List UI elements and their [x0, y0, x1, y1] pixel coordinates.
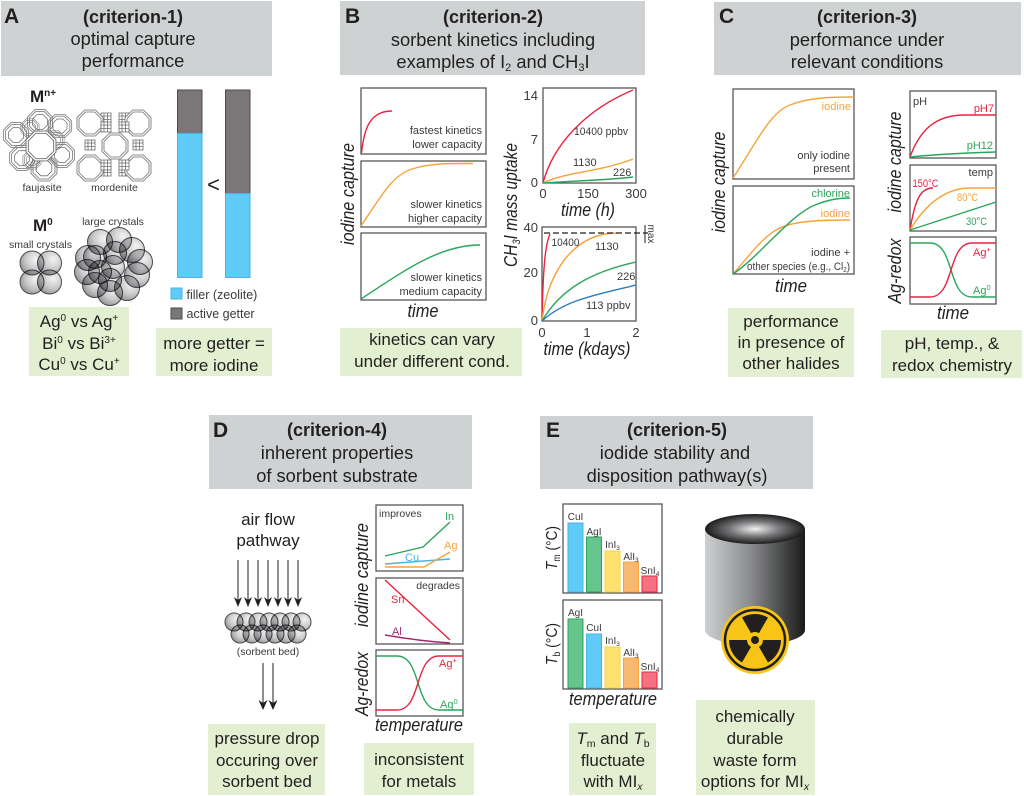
- callout: pH temp redox: redox chemistry: [892, 356, 1012, 375]
- chart: degrades: degrades: [416, 580, 460, 592]
- header B: (criterion-2): [443, 7, 543, 27]
- chart: uptake in kdays: 0: [538, 325, 546, 340]
- chart: slower kinetics higher capacity: [361, 161, 486, 227]
- chart: uptake in kdays: [524, 220, 648, 340]
- chart: temperature: 30°C: [966, 216, 987, 228]
- callout: oxidation states: vs Cu: [66, 355, 114, 374]
- axis: time: time: [937, 303, 969, 323]
- chart: temperature: temp: [969, 167, 993, 179]
- bar chart: boiling points: AgI: [568, 608, 583, 619]
- chart: uptake in kdays: 1130: [595, 241, 619, 253]
- legend: filler (zeolite): [186, 288, 257, 302]
- header E: [540, 416, 813, 489]
- bar chart: melting points: 3: [635, 557, 639, 564]
- chart: uptake in hours: 0: [531, 175, 538, 190]
- callout: pressure drop: pressure drop: [215, 729, 319, 748]
- header B: B: [345, 5, 360, 28]
- chart: temperature: [910, 165, 996, 231]
- icon: faujasite framework: [4, 110, 74, 181]
- axis: boiling temperature: (°C): [544, 623, 561, 652]
- axis: melting temperature: (°C): [544, 526, 561, 554]
- chart: uptake in hours: 300: [625, 186, 647, 201]
- header A: A: [4, 5, 19, 28]
- bar chart: boiling points: SnI: [641, 662, 656, 673]
- chart: Ag redox vs temperature: +: [452, 656, 457, 665]
- icon: small crystals: [20, 251, 62, 294]
- header B: sorbent kinetics including: [391, 29, 595, 50]
- axis: iodine capture: iodine capture: [885, 112, 905, 212]
- bar chart: boiling points: 3: [616, 641, 620, 648]
- header D: (criterion-4): [287, 420, 387, 440]
- label: M 0: M: [33, 216, 47, 235]
- chart: uptake in hours: 1130: [573, 157, 597, 169]
- icon: radiation symbol: [721, 606, 789, 674]
- chart: temperature: 150°C: [912, 178, 939, 190]
- axis: iodine capture: iodine capture: [338, 143, 358, 245]
- bar chart: boiling points: [563, 600, 662, 689]
- chart: uptake in hours: 0: [539, 186, 547, 201]
- callout: pH temp redox: pH, temp., &: [905, 334, 1000, 353]
- callout: pH temp redox: [881, 330, 1022, 378]
- axis: Ag-redox: Ag-redox: [352, 651, 372, 717]
- chart: Ag redox vs temperature: 0: [453, 697, 458, 706]
- header B: 3: [578, 62, 584, 74]
- axis: boiling temperature: T: [544, 655, 561, 665]
- chart: iodine plus other species: iodine +: [811, 247, 850, 259]
- header B: [340, 1, 645, 75]
- callout: durable waste forms: chemically: [715, 707, 795, 726]
- chart: only iodine: iodine: [822, 101, 851, 113]
- callout: other halides: [728, 308, 854, 377]
- label: large crystals: large crystals: [82, 216, 144, 228]
- callout: pressure drop: [208, 724, 325, 795]
- chart: pH: pH: [913, 96, 927, 108]
- label: faujasite: faujasite: [22, 182, 62, 194]
- header E: E: [546, 419, 560, 442]
- callout: oxidation states: vs Bi: [63, 334, 104, 353]
- callout: oxidation states: 3+: [104, 335, 116, 346]
- text: air flow pathway: [236, 510, 300, 550]
- axis: iodine capture: iodine capture: [352, 523, 372, 627]
- label: M 0: 0: [47, 217, 53, 228]
- callout: oxidation states: Ag: [40, 312, 61, 331]
- bar chart: melting points: CuI: [568, 512, 583, 523]
- callout: other halides: in presence of: [738, 333, 845, 352]
- header D: inherent properties: [261, 442, 413, 463]
- header D: [209, 415, 472, 489]
- callout: Tm and Tb: x: [636, 781, 643, 793]
- callout: Tm and Tb: with MI: [583, 772, 637, 791]
- callout: pressure drop: occuring over: [216, 751, 318, 770]
- header C: performance under: [790, 29, 944, 50]
- header A: [1, 1, 272, 76]
- chart: iodine plus other species: 2: [843, 267, 847, 274]
- panel E: criterion 5: [540, 416, 815, 795]
- callout: durable waste forms: durable: [727, 729, 783, 748]
- header E: disposition pathway(s): [587, 465, 767, 486]
- header E: (criterion-5): [627, 420, 727, 440]
- chart: Ag redox vs temperature: Ag: [439, 658, 452, 670]
- chart: uptake in kdays: 226: [617, 271, 635, 283]
- chart: improves: In: [445, 511, 454, 523]
- legend: active getter: [186, 307, 255, 321]
- icon: mordenite framework: [77, 110, 151, 181]
- callout: other halides: performance: [743, 312, 839, 331]
- bar chart: melting points: [563, 504, 662, 593]
- callout: durable waste forms: options for MI: [701, 772, 804, 791]
- less-than sign: <: [207, 172, 220, 197]
- label: small crystals: small crystals: [9, 239, 72, 251]
- label: sorbent bed: (sorbent bed): [237, 646, 299, 658]
- callout: Tm and Tb: T: [576, 729, 588, 748]
- callout: inconsistent for metals: inconsistent: [374, 750, 464, 769]
- callout: kinetics: [340, 328, 522, 376]
- callout: other halides: other halides: [742, 354, 840, 373]
- bar chart: boiling points: CuI: [586, 623, 602, 634]
- callout: Tm and Tb: m: [587, 738, 596, 750]
- axis: melting temperature: T: [544, 561, 561, 570]
- callout: oxidation states: Cu: [38, 355, 60, 374]
- chart: only iodine: present: [813, 163, 850, 175]
- callout: durable waste forms: x: [803, 781, 810, 793]
- bar: low getter: [178, 90, 202, 278]
- chart: Ag redox vs temperature: Ag: [440, 699, 453, 711]
- callout: Tm and Tb: b: [644, 738, 650, 750]
- callout: inconsistent for metals: [364, 743, 474, 795]
- chart: uptake in kdays: 0: [531, 313, 538, 328]
- callout: oxidation states: [29, 307, 129, 376]
- callout: more getter: [156, 328, 272, 376]
- chart: uptake in kdays: 1: [583, 325, 591, 340]
- axis: CH3I mass uptake: 3: [511, 239, 523, 245]
- chart: degrades: [376, 578, 463, 644]
- chart: uptake in kdays: 113 ppbv: [586, 300, 631, 312]
- chart: slower kinetics medium capacity: slower kinetics: [410, 272, 482, 284]
- callout: Tm and Tb: and: [596, 729, 633, 748]
- text: air flow pathway: pathway: [236, 531, 300, 550]
- header D: of sorbent substrate: [256, 465, 418, 486]
- callout: Tm and Tb: fluctuate: [581, 751, 645, 770]
- label: M n+: n+: [44, 88, 56, 99]
- callout: more getter: more iodine: [170, 356, 258, 375]
- axis: Ag-redox: Ag-redox: [885, 238, 905, 304]
- chart: Ag redox vs time: Ag: [973, 285, 986, 297]
- chart: only iodine: only iodine: [797, 150, 850, 162]
- label: max: max: [645, 225, 656, 243]
- chart: uptake in hours: 150: [577, 186, 599, 201]
- bar chart: melting points: 3: [616, 545, 620, 552]
- callout: inconsistent for metals: for metals: [382, 772, 456, 791]
- bar chart: melting points: SnI: [641, 566, 656, 577]
- chart: uptake in hours: 14: [524, 88, 538, 103]
- header C: [714, 2, 1021, 75]
- chart: uptake in hours: 7: [531, 132, 538, 147]
- callout: durable waste forms: waste form: [712, 751, 797, 770]
- axis: melting temperature: m: [552, 554, 563, 562]
- header C: C: [719, 5, 734, 28]
- chart: Ag redox vs time: +: [986, 245, 991, 254]
- callout: oxidation states: vs Ag: [66, 312, 112, 331]
- chart: pH: [910, 91, 996, 158]
- panel B: criterion 2: [338, 1, 656, 376]
- chart: uptake in hours: 10400 ppbv: [574, 126, 628, 138]
- header A: optimal capture: [70, 28, 196, 49]
- chart: uptake in hours: [524, 88, 647, 201]
- callout: kinetics: kinetics can vary: [369, 330, 495, 349]
- header B: I: [584, 51, 590, 72]
- callout: oxidation states: 0: [60, 356, 66, 367]
- chart: degrades: Sn: [391, 594, 404, 606]
- axis: time (h): time (h): [561, 200, 615, 220]
- callout: pressure drop: sorbent bed: [222, 772, 312, 791]
- callout: Tm and Tb: T: [633, 729, 645, 748]
- chart: uptake in kdays: 10400: [552, 237, 580, 249]
- header B: and CH: [511, 51, 578, 72]
- panel A: criterion 1: [1, 1, 272, 376]
- bar chart: melting points: InI: [605, 540, 616, 551]
- header B: 2: [505, 62, 511, 74]
- axis: temperature: temperature: [375, 715, 463, 735]
- axis: time: time: [775, 276, 807, 296]
- axis: CH3I mass uptake: I mass uptake: [501, 143, 521, 239]
- label: mordenite: mordenite: [91, 182, 138, 194]
- bar chart: boiling points: 4: [656, 667, 660, 674]
- chart: slower kinetics medium capacity: [361, 233, 486, 300]
- axis: boiling temperature: b: [552, 651, 563, 657]
- chart: uptake in kdays: 2: [632, 325, 640, 340]
- header B: examples of I: [396, 51, 505, 72]
- bar chart: melting points: AlI: [623, 552, 635, 563]
- chart: improves: Cu: [405, 552, 419, 564]
- chart: improves: Ag: [444, 540, 457, 552]
- icon: sorbent bed: [225, 613, 311, 643]
- chart: temperature: 80°C: [957, 192, 978, 204]
- chart: pH: pH12: [967, 140, 993, 152]
- chart: fastest kinetics: lower capacity: [412, 139, 482, 151]
- bar chart: boiling points: InI: [605, 636, 616, 647]
- callout: more getter: more getter =: [163, 334, 265, 353]
- panel D: criterion 4: [208, 415, 474, 795]
- axis: time (kdays): time (kdays): [544, 339, 630, 359]
- icon: waste drum: [705, 514, 805, 645]
- callout: oxidation states: 0: [61, 313, 67, 324]
- chart: fastest kinetics: [361, 88, 486, 154]
- chart: Ag redox vs time: [910, 237, 996, 304]
- header A: performance: [82, 50, 184, 71]
- callout: kinetics: under different cond.: [354, 352, 510, 371]
- axis: temperature: temperature: [569, 689, 657, 709]
- header E: iodide stability and: [600, 442, 750, 463]
- chart: Ag redox vs time: 0: [986, 283, 991, 292]
- callout: oxidation states: +: [114, 356, 120, 367]
- header C: relevant conditions: [791, 51, 943, 72]
- callout: Tm and Tb: [569, 723, 656, 795]
- legend: [171, 288, 257, 321]
- chart: iodine plus other species: ): [847, 261, 850, 273]
- icon: large crystals: [74, 228, 152, 306]
- chart: Ag redox vs temperature: [376, 650, 463, 716]
- panel C: criterion 3: [709, 2, 1022, 378]
- chart: iodine plus other species: other species (e.g., Cl: [747, 261, 854, 273]
- bar chart: melting points: 4: [656, 571, 660, 578]
- chart: pH: pH7: [974, 103, 994, 115]
- bar chart: boiling points: AlI: [623, 648, 635, 659]
- chart: slower kinetics higher capacity: higher capacity: [408, 213, 482, 225]
- arrows: exit flow: [258, 663, 278, 710]
- callout: oxidation states: +: [112, 313, 118, 324]
- header A: (criterion-1): [83, 7, 183, 27]
- bar chart: melting points: AgI: [586, 527, 602, 538]
- arrows: air flow: [234, 560, 302, 607]
- chart: uptake in kdays: 20: [524, 265, 538, 280]
- header C: (criterion-3): [817, 7, 917, 27]
- chart: fastest kinetics: fastest kinetics: [410, 125, 482, 137]
- chart: improves: improves: [379, 508, 422, 520]
- chart: degrades: Al: [392, 626, 402, 638]
- header D: D: [213, 419, 228, 442]
- callout: oxidation states: Bi: [42, 334, 57, 353]
- chart: slower kinetics medium capacity: medium capacity: [399, 286, 482, 298]
- text: air flow pathway: air flow: [241, 510, 296, 529]
- chart: uptake in hours: 226: [613, 167, 631, 179]
- chart: uptake in kdays: 40: [524, 220, 538, 235]
- callout: oxidation states: 0: [57, 335, 63, 346]
- chart: iodine plus other species: [733, 186, 854, 274]
- axis: iodine capture: iodine capture: [709, 132, 729, 232]
- axis: CH3I mass uptake: CH: [501, 241, 521, 267]
- chart: slower kinetics higher capacity: slower kinetics: [410, 199, 482, 211]
- label: M n+: M: [30, 87, 44, 106]
- chart: Ag redox vs time: Ag: [973, 247, 986, 259]
- chart: only iodine: [733, 89, 854, 179]
- axis: time: time: [408, 301, 438, 321]
- chart: iodine plus other species: iodine: [821, 208, 850, 220]
- bar: high getter: [226, 90, 250, 278]
- chart: iodine plus other species: chlorine: [811, 188, 850, 200]
- bar chart: boiling points: 3: [635, 653, 639, 660]
- callout: durable waste forms: [696, 700, 815, 795]
- chart: improves: [376, 505, 463, 571]
